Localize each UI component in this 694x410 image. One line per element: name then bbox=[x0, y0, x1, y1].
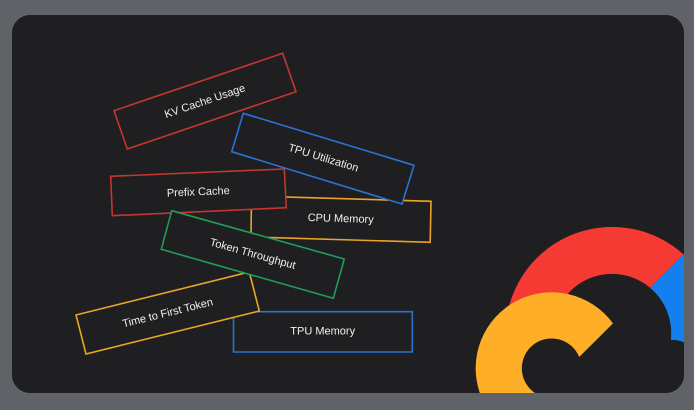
box: Prefix Cache bbox=[111, 169, 286, 216]
box: TPU Memory bbox=[234, 312, 412, 352]
box: CPU Memory bbox=[251, 196, 431, 242]
box: KV Cache Usage: KV Cache Usage bbox=[163, 82, 247, 121]
box: Time to First Token bbox=[76, 272, 259, 354]
box: Prefix Cache: Prefix Cache bbox=[167, 185, 230, 200]
box: CPU Memory: CPU Memory bbox=[308, 212, 374, 226]
box: KV Cache Usage bbox=[114, 53, 296, 149]
logo yellow arc bbox=[476, 292, 613, 393]
box: Token Throughput bbox=[161, 211, 344, 298]
box: Time to First Token: Time to First Token bbox=[121, 296, 214, 330]
logo red arc bbox=[505, 227, 683, 334]
box: Token Throughput: Token Throughput bbox=[208, 237, 297, 272]
icon: cloud logo bbox=[476, 227, 684, 393]
box: TPU Utilization bbox=[232, 113, 414, 204]
logo blue segment bbox=[650, 254, 684, 342]
box: TPU Utilization: TPU Utilization bbox=[287, 142, 360, 175]
box: TPU Memory: TPU Memory bbox=[290, 326, 356, 338]
